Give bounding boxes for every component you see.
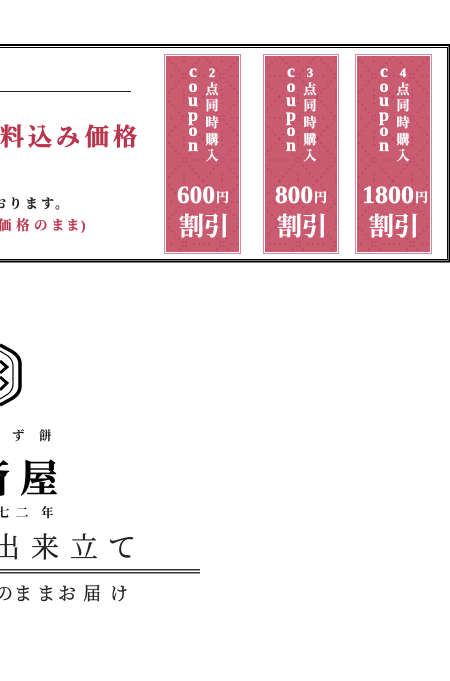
discount label: 割引 (178, 213, 229, 241)
discount label: 割引 (276, 213, 327, 241)
double rule (0, 569, 200, 574)
panel: coupon frame (0, 45, 450, 262)
discount amount: 800 (275, 182, 313, 209)
quantity label: 3点同時購入 (303, 65, 317, 163)
rule above price heading (0, 91, 131, 92)
discount amount: 1800 (362, 182, 414, 209)
panel: coupon 4 items (356, 54, 432, 254)
quantity label: 4点同時購入 (396, 65, 410, 163)
yen unit: 円 (415, 190, 428, 205)
panel: coupon 3 items (264, 54, 338, 254)
coupon word: coupon (286, 61, 296, 155)
text block: red note: 価格のまま) (0, 217, 86, 233)
quantity label: 2点同時購入 (205, 65, 219, 163)
text: product name fragment: ず餅 (12, 428, 52, 443)
yen unit: 円 (216, 190, 229, 205)
yen unit: 円 (314, 190, 327, 205)
heading: tax included price: 料込み価格 (0, 124, 137, 151)
icon: hexagon crest (0, 345, 20, 405)
discount amount: 600 (177, 182, 215, 209)
panel: coupon 2 items (164, 54, 240, 254)
discount label: 割引 (368, 213, 419, 241)
coupon word: coupon (379, 61, 389, 155)
coupon word: coupon (188, 61, 198, 155)
